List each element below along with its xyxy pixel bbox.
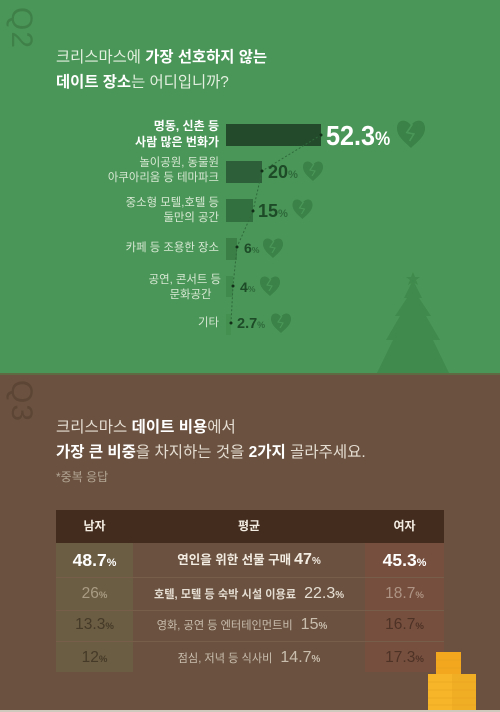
panel: Q3 brown section (0, 373, 500, 712)
panel: Q2 green section (0, 0, 500, 373)
table header: 남자 (83, 519, 106, 533)
broken heart icons (260, 121, 425, 333)
bottom edge strip (0, 710, 500, 712)
Q2 question heading: 크리스마스에 가장 선호하지 않는 (56, 49, 267, 66)
label 5: 공연, 콘서트 등 (149, 274, 221, 286)
value: 15%: 15% (258, 201, 288, 221)
label 2: 놀이공원, 동물원 (139, 157, 219, 169)
value: 2.7%: 2.7% (237, 316, 265, 332)
row 3: 13.3% (75, 616, 114, 633)
row 4: 17.3% (385, 649, 424, 666)
bar chart: least preferred date places (226, 120, 425, 333)
row 2: 18.7% (385, 585, 424, 602)
row 1: 연인을 위한 선물 구매47% (177, 551, 321, 568)
label 6: 기타 (198, 317, 219, 329)
bars (226, 124, 321, 335)
icon: coin stacks (428, 652, 476, 710)
male column (56, 543, 133, 672)
footnote: *중복 응답 (56, 470, 108, 484)
bar labels (108, 119, 221, 329)
table: date costs (56, 510, 444, 672)
row 2 (82, 585, 424, 602)
row 1: 48.7% (73, 550, 116, 570)
Q2 question heading (56, 48, 267, 91)
row 4: 12% (82, 649, 107, 666)
table header (56, 510, 444, 543)
value: 6%: 6% (244, 240, 260, 256)
Q2 question heading: 데이트 장소는 어디입니까? (56, 74, 229, 91)
tree illustration (377, 273, 449, 373)
Q3 question heading: 가장 큰 비중을 차지하는 것을 2가지 골라주세요. (56, 444, 366, 461)
value: 20%: 20% (268, 162, 298, 182)
table header: 여자 (393, 519, 416, 533)
row 2: 26% (82, 585, 107, 602)
label 3 (126, 196, 219, 224)
Q3 question heading (56, 418, 366, 461)
label 3: 중소형 모텔,호텔 등 (126, 197, 219, 209)
label 2 (108, 156, 219, 184)
row 1: 45.3% (383, 550, 426, 570)
female column (365, 543, 444, 672)
label 1: 명동, 신촌 등 (154, 119, 219, 133)
divider strip (0, 373, 500, 375)
question number Q2: Q2 (5, 7, 38, 49)
row dividers (56, 577, 444, 578)
row 4: 점심, 저녁 등 식사비 14.7% (178, 649, 320, 666)
Q3 question heading: 크리스마스 데이트 비용에서 (56, 419, 236, 436)
row 3: 16.7% (385, 616, 424, 633)
label 1: 사람 많은 번화가 (135, 135, 219, 149)
value: 52.3%: 52.3% (326, 120, 390, 151)
row 3 (75, 616, 424, 633)
label 5 (149, 273, 221, 301)
table header: 평균 (238, 519, 260, 533)
trend line with dots (230, 134, 322, 324)
label 5: 문화공간 (170, 289, 212, 301)
label 1 (135, 119, 219, 149)
row 2: 호텔, 모텔 등 숙박 시설 이용료 22.3% (154, 585, 344, 602)
row 1 (72, 550, 426, 570)
question number Q3: Q3 (5, 380, 38, 422)
label 2: 아쿠아리움 등 테마파크 (108, 172, 219, 184)
row 4 (82, 649, 424, 666)
label 3: 둘만의 공간 (163, 212, 219, 224)
value: 4%: 4% (240, 279, 256, 295)
label 4: 카페 등 조용한 장소 (126, 242, 219, 254)
row 3: 영화, 공연 등 엔터테인먼트비 15% (157, 616, 327, 633)
